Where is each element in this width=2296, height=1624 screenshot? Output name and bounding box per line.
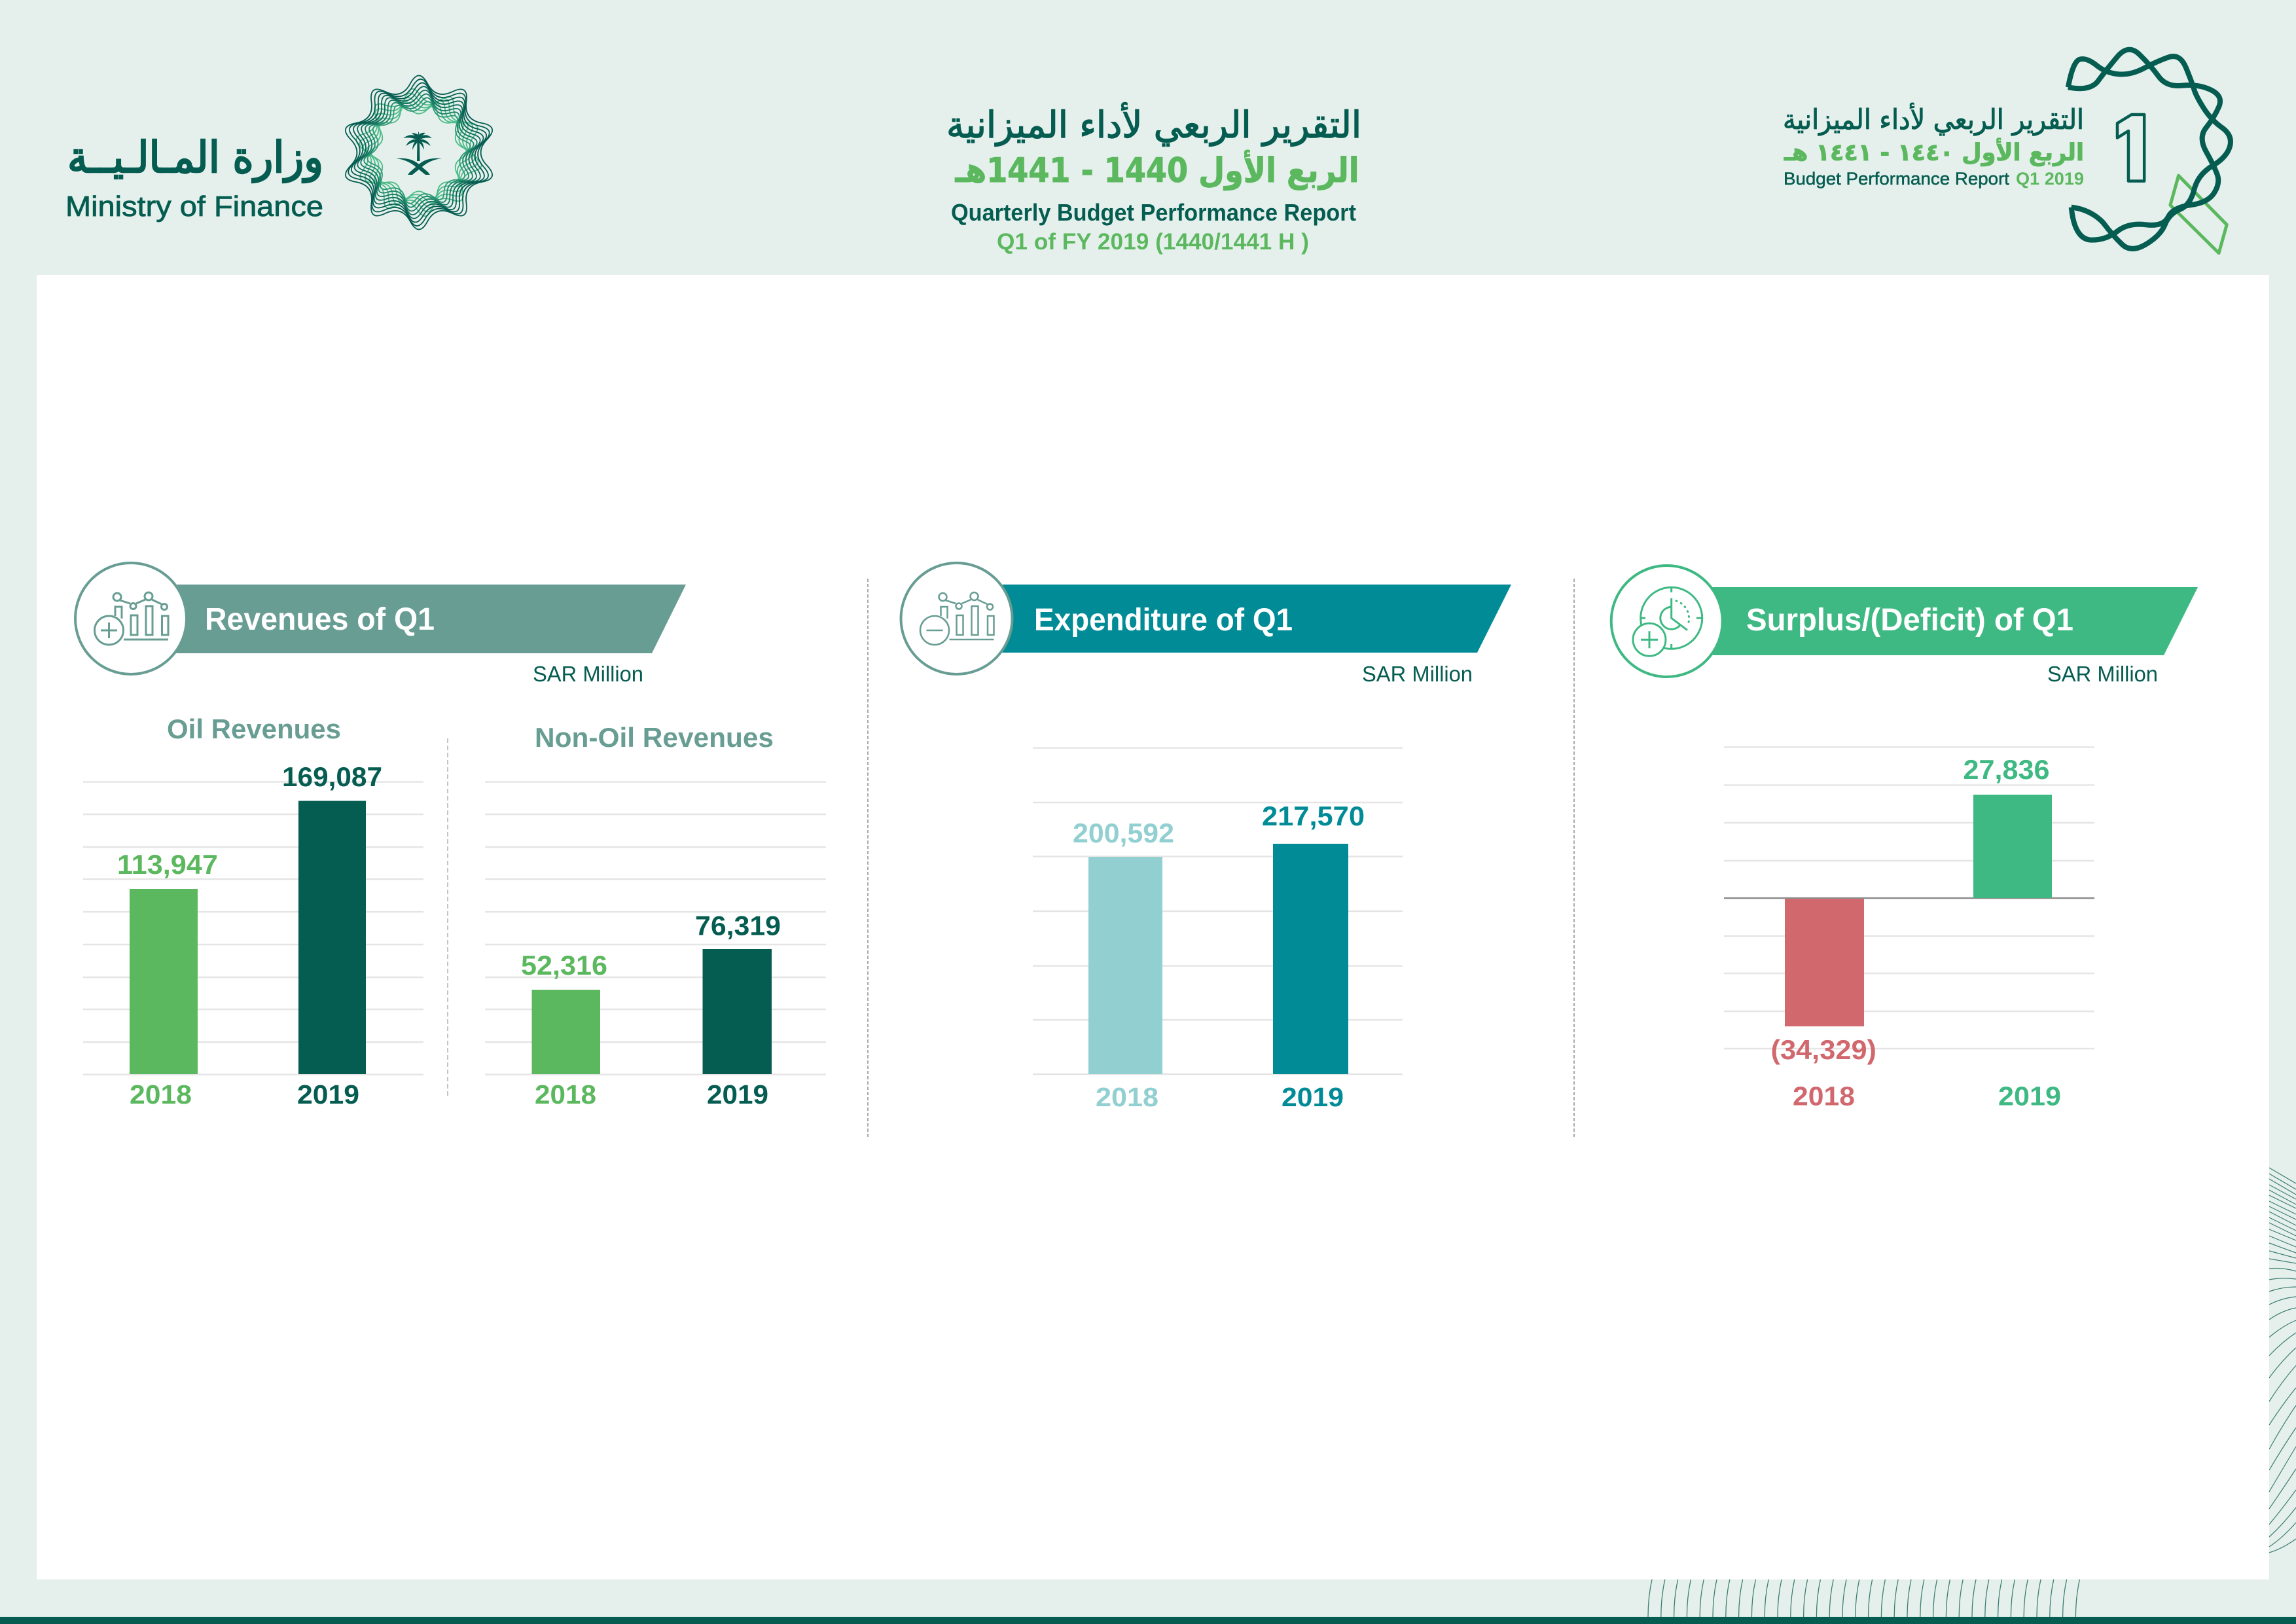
chart: oil revenues: 2018 — [130, 1079, 192, 1110]
chart: oil revenues: 2019 — [297, 1079, 359, 1110]
chart: surplus or deficit — [1724, 748, 2094, 1111]
chart: expenditure: 217,570 — [1262, 801, 1365, 831]
revenues unit: SAR Million — [533, 662, 643, 686]
chart: surplus or deficit: (34,329) — [1771, 1034, 1876, 1065]
badge Arabic line 2: الربع الأول ١٤٤٠ - ١٤٤١ هـ — [1784, 137, 2084, 166]
badge Arabic line 1: التقرير الربعي لأداء الميزانية — [1783, 102, 2084, 136]
surplus header ribbon — [1695, 587, 2198, 655]
divider between revenue charts — [447, 738, 448, 1098]
bottom bar — [0, 1617, 2296, 1624]
chart: non-oil revenues: 2019 — [707, 1079, 768, 1110]
badge quarter label: Q1 2019 — [2016, 169, 2084, 189]
chart: expenditure: 2019 — [1282, 1082, 1344, 1112]
panel: expenditure — [901, 563, 1511, 1112]
chart: expenditure — [1033, 748, 1403, 1112]
chart: expenditure: 2018 — [1096, 1082, 1158, 1112]
section divider left — [867, 579, 869, 1138]
title English line 2: Q1 of FY 2019 (1440/1441 H ) — [997, 229, 1309, 255]
icon: revenue chart with plus — [75, 563, 187, 674]
expenditure heading: Expenditure of Q1 — [1034, 603, 1293, 638]
right decorative curves — [2269, 1168, 2296, 1553]
chart: expenditure: 200,592 — [1073, 818, 1174, 848]
chart: surplus or deficit: 2019 — [1998, 1081, 2061, 1111]
badge English label: Budget Performance Report — [1784, 169, 2010, 189]
icon: expenditure chart with minus — [901, 563, 1012, 674]
logo: Ministry of Finance — [65, 67, 503, 238]
revenues header ribbon — [157, 585, 686, 653]
logo emblem: wavy rings with palm and swords — [334, 67, 503, 238]
chart: oil revenues: Oil Revenues — [167, 713, 341, 744]
chart: oil revenues — [83, 713, 423, 1110]
chart: surplus or deficit: 27,836 — [1964, 754, 2050, 785]
chart: non-oil revenues: 76,319 — [695, 910, 781, 941]
report badge top right — [1783, 50, 2231, 253]
bottom decorative ticks — [1648, 1579, 2079, 1617]
chart: non-oil revenues: 2018 — [535, 1079, 596, 1110]
white content panel — [37, 275, 2269, 1579]
expenditure header ribbon — [982, 585, 1511, 653]
surplus heading: Surplus/(Deficit) of Q1 — [1746, 603, 2073, 638]
panel: surplus or deficit — [1611, 566, 2198, 1111]
title Arabic line 1: التقرير الربعي لأداء الميزانية — [946, 102, 1361, 147]
chart: surplus or deficit: 2018 — [1793, 1081, 1855, 1111]
panel: revenues — [75, 563, 826, 1110]
icon: clock with plus — [1611, 566, 1723, 677]
logo Arabic wordmark: وزارة المـالـيــة — [67, 132, 323, 183]
title block — [946, 102, 1361, 255]
surplus unit: SAR Million — [2047, 662, 2158, 686]
title English line 1: Quarterly Budget Performance Report — [951, 199, 1356, 226]
chart: non-oil revenues: 52,316 — [521, 950, 607, 981]
chart: non-oil revenues — [485, 722, 826, 1110]
section divider right — [1573, 579, 1575, 1138]
logo English wordmark: Ministry of Finance — [65, 190, 323, 223]
chart: oil revenues: 169,087 — [282, 761, 382, 792]
chart: non-oil revenues: Non-Oil Revenues — [535, 722, 774, 753]
expenditure unit: SAR Million — [1362, 662, 1473, 686]
title Arabic line 2: الربع الأول 1440 - 1441هـ — [955, 149, 1359, 190]
chart: oil revenues: 113,947 — [117, 849, 218, 880]
revenues heading: Revenues of Q1 — [205, 602, 435, 637]
badge ribbon ornament — [2068, 50, 2231, 253]
